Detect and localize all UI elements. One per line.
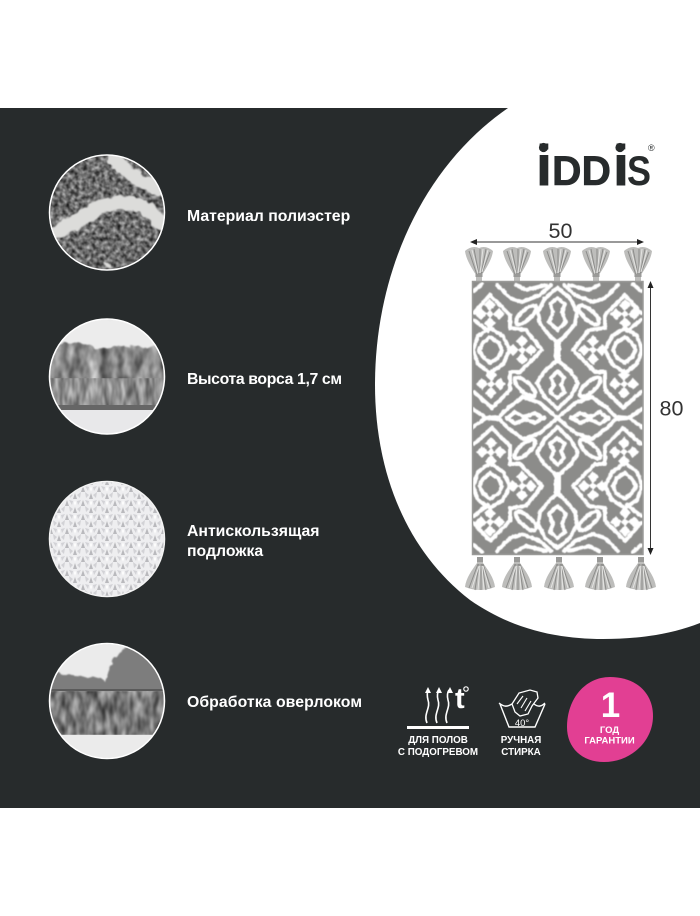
panel: white curved area xyxy=(375,108,700,639)
label: anti-slip backing: Антискользящая xyxy=(187,523,319,540)
caption: hand wash: РУЧНАЯ xyxy=(501,735,541,746)
logo: IDDIS: DD xyxy=(552,147,611,194)
icon: heated floor xyxy=(407,683,469,729)
dimension: height 80 xyxy=(648,281,683,555)
label: material: Материал полиэстер xyxy=(187,208,350,225)
logo: IDDIS xyxy=(535,134,655,197)
dimension: height 80: 80 xyxy=(660,396,683,420)
rug tassels: bottom xyxy=(465,557,656,590)
icon: hand wash: 40° xyxy=(515,718,529,729)
photo: pile material xyxy=(50,155,165,270)
photo: overlock edge xyxy=(50,643,165,759)
logo: IDDIS: i xyxy=(612,134,630,197)
rug with white ornament xyxy=(472,281,644,555)
icon: hand wash xyxy=(499,690,545,729)
badge: 1 year warranty: 1 xyxy=(601,686,620,725)
dimension: width 50: 50 xyxy=(549,219,572,243)
photo: pile height xyxy=(50,319,164,435)
caption: heated floor: ДЛЯ ПОЛОВ xyxy=(408,735,468,746)
dimension: width 50 xyxy=(470,219,644,245)
rug tassels: top xyxy=(465,247,652,283)
infographic canvas xyxy=(0,108,700,808)
logo: IDDIS: i xyxy=(535,134,553,197)
logo: IDDIS: S xyxy=(627,147,651,194)
badge: 1 year warranty: ГАРАНТИИ xyxy=(584,736,635,746)
label: anti-slip backing: подложка xyxy=(187,543,263,560)
caption: heated floor: С ПОДОГРЕВОМ xyxy=(398,747,478,758)
panel: dark background xyxy=(0,108,700,808)
icon: heated floor: t xyxy=(455,683,465,715)
badge: 1 year warranty: ГОД xyxy=(600,725,619,736)
label: overlock: Обработка оверлоком xyxy=(187,694,362,711)
badge: 1 year warranty xyxy=(567,677,653,762)
photo: anti-slip backing xyxy=(49,481,165,597)
label: pile height: Высота ворса 1,7 см xyxy=(187,371,342,388)
logo: IDDIS: ® xyxy=(648,143,655,153)
caption: hand wash: СТИРКА xyxy=(501,747,541,758)
